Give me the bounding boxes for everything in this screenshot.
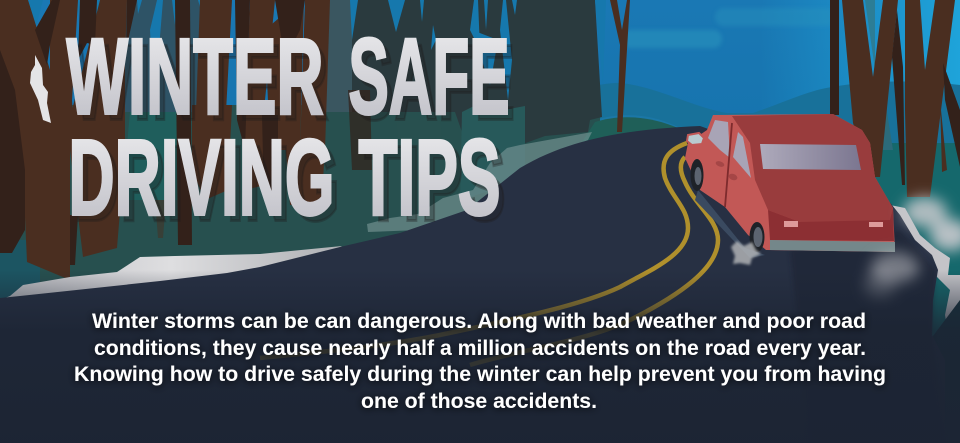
title shadow: TIPS: [364, 124, 506, 244]
intro paragraph: Winter storms can be can dangerous. Along with bad weather and poor road: [92, 310, 866, 333]
green hill behind road: [580, 117, 678, 145]
door line: [725, 123, 732, 207]
road shade right: [790, 230, 945, 443]
smoke cloud: [864, 197, 960, 299]
title shadow: DRIVING: [74, 124, 340, 244]
title text: SAFE: [348, 16, 510, 136]
title text: TIPS: [358, 118, 500, 238]
intro paragraph: Knowing how to drive safely during the winter can help prevent you from having: [74, 363, 886, 386]
right ground: [690, 143, 960, 443]
title text: DRIVING: [68, 118, 334, 238]
road: [0, 126, 945, 443]
intro paragraph: [74, 310, 886, 413]
title shadow: [72, 22, 515, 244]
car shadow: [695, 190, 765, 258]
right snow band: [890, 205, 960, 345]
side mirror: [687, 133, 704, 145]
title shadow: SAFE: [354, 22, 515, 142]
dark teal roadside: [930, 300, 960, 443]
road markings: yellow double line: [260, 143, 718, 365]
rear wheel: [750, 222, 764, 252]
left snow bank: [0, 246, 342, 302]
front wheel: [690, 159, 704, 191]
tyre spray: [731, 241, 761, 265]
door handles: [715, 160, 738, 181]
left forest: slate trees and sky slits: [28, 0, 606, 200]
car: [685, 114, 895, 258]
title shadow: WINTER: [72, 22, 329, 142]
teal lower left corner: [0, 240, 40, 300]
tail lights: [784, 221, 883, 227]
right trees: [610, 0, 960, 197]
intro paragraph: conditions, they cause nearly half a million accidents on the road every year.: [94, 337, 866, 360]
left forest: dark trunks: [0, 0, 372, 265]
intro paragraph: one of those accidents.: [361, 390, 597, 413]
car roof and trunk: [732, 114, 893, 222]
title text: [66, 16, 510, 238]
front side window: [708, 120, 730, 158]
bumper: [770, 240, 895, 252]
rear window: [760, 144, 861, 170]
car rear panel: [768, 208, 894, 241]
left forest: brown trunks: [0, 0, 330, 280]
rear side window: [733, 132, 751, 178]
car body: [685, 114, 895, 252]
distant hills: [520, 81, 960, 200]
far side snow bank: [367, 132, 592, 232]
left ground: [0, 105, 680, 300]
snow patch on trunk: [30, 55, 51, 123]
dark gradient over lower road: [0, 270, 960, 443]
title: [66, 16, 515, 244]
title text: WINTER: [66, 16, 324, 136]
